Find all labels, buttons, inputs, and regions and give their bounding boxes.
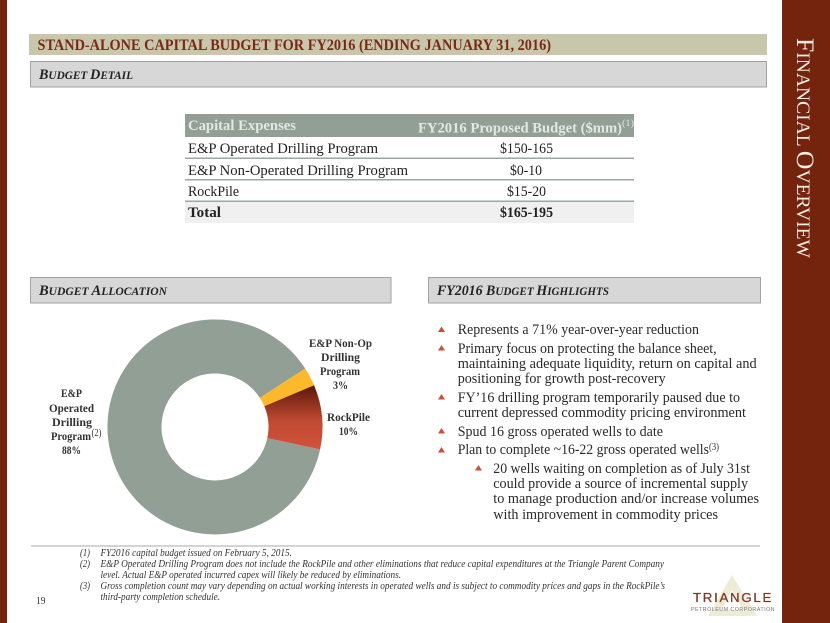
heading: Budget Detail [30, 62, 766, 87]
label: E&P Operated [49, 386, 102, 457]
page number: 19 [36, 596, 46, 607]
label: Non-Op: Drilling [321, 350, 360, 364]
row: non-operated [188, 163, 542, 179]
footnotes: (1) [80, 548, 91, 559]
highlights list: positioning for growth post-recovery [458, 371, 666, 387]
highlights list: maintaining adequate liquidity, return on capital and [458, 356, 757, 372]
row: non-operated: $0-10 [510, 163, 542, 179]
highlights list: current depressed commodity pricing environment [458, 405, 747, 421]
table: capital expenses [185, 114, 634, 223]
label: RockPile [327, 410, 371, 438]
label: E&P Operated: (2) [92, 428, 102, 439]
heading: FY2016 Budget Highlights: FY2016 BUDGET HIGHLIGHTS [436, 283, 609, 299]
heading: Budget Detail: BUDGET DETAIL [38, 67, 133, 83]
bullet icons [438, 326, 482, 470]
label: RockPile: RockPile [327, 410, 371, 424]
row: RockPile: RockPile [188, 184, 239, 200]
slice: Non-Op 3% [260, 368, 314, 406]
highlights list: could provide a source of incremental supply [493, 476, 748, 492]
label: Non-Op: 3% [333, 378, 348, 392]
title bar: STAND-ALONE CAPITAL BUDGET FOR FY2016 (ENDING JANUARY 31, 2016) [38, 37, 551, 54]
footnotes: Gross completion count may vary depending on actual working interests in operated wells and is subject to commodity prices and gaps in the RockPile’s [100, 581, 665, 592]
highlights list [438, 322, 759, 523]
logo: Triangle Petroleum Corporation [691, 575, 775, 616]
title bar [29, 34, 767, 55]
highlights list: 20 wells waiting on completion as of July 31st [493, 461, 751, 477]
slice: E&P Operated 88% [107, 319, 320, 534]
highlights list: with improvement in commodity prices [493, 507, 718, 523]
footnotes [80, 548, 665, 603]
table header: Capital Expenses [188, 118, 296, 134]
highlights list: Primary focus on protecting the balance sheet, [458, 341, 717, 357]
total row background [185, 202, 634, 223]
label: E&P Operated: Drilling [52, 415, 92, 429]
heading: Budget Allocation [30, 278, 391, 303]
row: RockPile [188, 184, 546, 200]
label: Non-Op [309, 336, 372, 392]
row: operated: $150-165 [500, 141, 553, 157]
label: RockPile: 10% [339, 424, 358, 438]
footnotes: level. Actual E&P operated incurred capex will likely be reduced by eliminations. [100, 570, 401, 581]
row: total: Total [188, 205, 221, 221]
heading: Budget Allocation: BUDGET ALLOCATION [38, 283, 168, 299]
label: E&P Operated: Program [51, 429, 91, 443]
footnotes: (3) [80, 581, 91, 592]
logo: Triangle Petroleum Corporation: TRIANGLE [693, 591, 773, 605]
table header [185, 114, 634, 137]
footnotes: FY2016 capital budget issued on February 5, 2015. [100, 548, 292, 559]
label: Non-Op: Program [320, 364, 360, 378]
label: Non-Op: E&P Non-Op [309, 336, 372, 350]
donut chart [107, 319, 322, 534]
table header: FY2016 Proposed Budget ($mm) [418, 120, 622, 136]
highlights list: Plan to complete ~16-22 gross operated wells [458, 442, 709, 458]
slice: RockPile 10% [264, 385, 322, 449]
right band [782, 0, 830, 623]
section title: Financial Overview: F INANCIAL O VERVIEW [791, 38, 818, 258]
logo: Triangle Petroleum Corporation: PETROLEUM CORPORATION [691, 607, 775, 613]
footnotes: third-party completion schedule. [100, 592, 220, 603]
heading: FY2016 Budget Highlights [428, 278, 760, 303]
highlights list: Represents a 71% year-over-year reduction [458, 322, 699, 338]
highlights list: Spud 16 gross operated wells to date [458, 424, 663, 440]
row: total: $165-195 [500, 205, 553, 221]
highlights list: to manage production and/or increase volumes [493, 491, 759, 507]
highlights list: (3) [709, 442, 719, 453]
footnotes: (2) [80, 559, 91, 570]
label: E&P Operated: 88% [62, 443, 81, 457]
row: non-operated: E&P Non-Operated Drilling Program [188, 163, 408, 179]
row: total [188, 205, 553, 221]
row: operated [188, 141, 553, 157]
footnotes: E&P Operated Drilling Program does not include the RockPile and other eliminations that reduce capital expenditures at the Triangle Parent Company [100, 559, 665, 570]
table header: (1) [622, 118, 634, 129]
left band [0, 0, 7, 623]
row: operated: E&P Operated Drilling Program [188, 141, 378, 157]
highlights list: FY’16 drilling program temporarily paused due to [458, 390, 740, 406]
label: E&P Operated: E&P [61, 386, 82, 400]
label: E&P Operated: Operated [49, 401, 94, 415]
row: RockPile: $15-20 [507, 184, 546, 200]
